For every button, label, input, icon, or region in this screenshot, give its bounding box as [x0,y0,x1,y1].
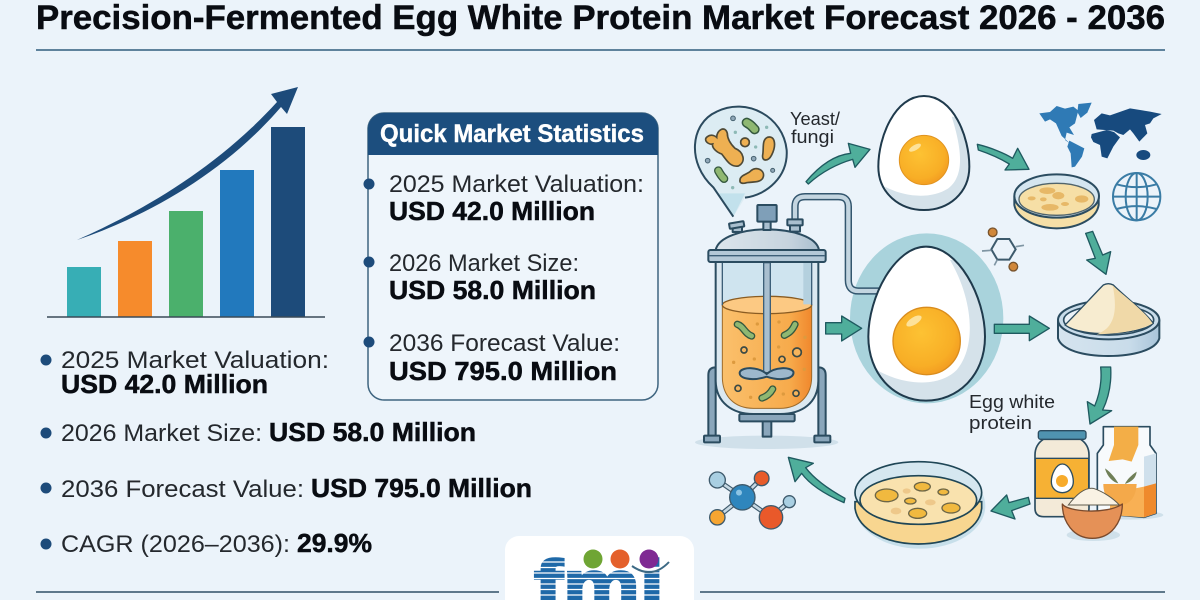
top nozzles [729,205,803,232]
label: egg white protein [969,392,1055,433]
label 2: 2026 Market Size: [389,250,579,277]
value: 2025 valuation: USD 42.0 Million [61,369,268,399]
upper egg shading [885,117,973,213]
value: 2026 size: USD 58.0 Million [269,417,476,447]
logo card [505,536,694,600]
bar 1 [67,267,101,317]
value 2: USD 58.0 Million [389,275,596,305]
arrow: fermenter to egg [826,316,862,341]
label line 1: Yeast/ [790,109,840,129]
icon: microbe speech bubble and upper egg [695,96,973,217]
bullet 3 [364,336,374,348]
bullet 1 [364,178,374,190]
icon: products, large petri dish, molecule [709,367,1163,549]
left statistics list [40,347,532,558]
bubble tail fill [717,193,745,217]
vessel [716,262,818,414]
growth arrow [77,87,298,240]
floor shadow [695,436,838,449]
big yolk [893,307,960,375]
bar 4 [220,170,254,317]
bar 3 [169,211,203,317]
liquid surface [722,296,812,314]
molecule: hexagon [982,228,1024,271]
arrow: petri to powder [1086,231,1111,274]
spores [705,116,775,172]
value 3: USD 795.0 Million [389,356,617,386]
stirrer shaft [764,263,770,373]
label: yeast/fungi [790,109,840,147]
label 1: 2025 Market Valuation: [389,171,644,198]
big egg shading [877,257,990,403]
halo [850,233,1003,403]
bullet: 2026 size [40,428,52,438]
icon: map, globe, petri dish, powder [977,103,1162,356]
yeast cluster [706,129,775,183]
arrow: yeast to egg [806,143,870,184]
world map: eurasia, africa, australia [1091,108,1162,160]
bullet: 2025 valuation [40,354,52,366]
arrow: big egg to powder [994,316,1049,341]
arc [632,562,669,572]
big egg outline [868,247,985,401]
bar 5 [271,127,305,317]
carton [1097,427,1163,520]
big egg [868,247,985,401]
bar 2 [118,241,152,317]
logo: fmi [505,536,694,600]
label 3: 2036 Forecast Value: [389,330,620,357]
panel heading: Quick Market Statistics [380,120,644,148]
arrow: petri to fermenter [788,457,845,503]
value: 2036 forecast: USD 795.0 Million [311,473,532,503]
legs and feet [704,367,830,442]
text: CAGR: CAGR (2026–2036): [61,531,290,558]
upper egg [878,96,969,210]
orange circle [610,550,630,568]
liquid [722,305,812,408]
jar [1035,431,1089,517]
text: 2025 valuation: 2025 Market Valuation: [61,347,329,374]
yolk highlight [908,142,922,153]
arrow: egg to petri dish [977,144,1029,170]
label line 1: Egg white [969,392,1055,412]
flange [708,250,826,262]
value 1: USD 42.0 Million [389,196,595,226]
dome [716,229,819,250]
panel header [368,113,658,155]
icon: big egg halo, fermenter and pipe [695,197,1003,449]
flange line [709,254,825,258]
upper egg outline [878,96,969,210]
vessel highlight [803,263,812,304]
arrow: products to petri dish [991,495,1030,519]
arrow: powder to products [1087,367,1112,424]
world map: americas [1039,103,1092,167]
bullet: CAGR [40,538,52,550]
value: CAGR: 29.9% [297,528,372,558]
wordmark stripes [530,562,670,595]
microbes in liquid [732,320,807,399]
yolk highlight [905,313,923,329]
glass upper [722,263,812,306]
chart baseline [47,316,325,318]
purple circle [640,550,658,568]
small dots [731,126,768,189]
pipe [795,197,880,291]
panel: quick market statistics [364,113,658,400]
bubble [695,107,787,217]
globe [1113,173,1160,220]
glass inner walls [722,263,812,305]
large petri dish [855,462,985,549]
label line 2: fungi [791,127,834,147]
small petri dish [1014,174,1099,228]
powder bowl [1058,284,1159,356]
bullet: 2036 forecast [40,482,52,494]
small bowl of powder [1062,488,1122,541]
panel frame [368,113,658,400]
title: Precision-Fermented Egg White Protein Market Forecast 2026 - 2036 [36,0,1165,37]
bar chart with growth arrow [47,87,325,317]
bubble outline [695,107,787,217]
green microbes [747,123,755,129]
text: 2026 size: 2026 Market Size: [61,420,262,447]
text: 2036 forecast: 2036 Forecast Value: [61,476,304,503]
label line 2: protein [969,413,1032,433]
molecule [709,471,795,529]
impeller [740,368,793,379]
upper yolk [899,135,949,185]
bullet 2 [364,256,374,268]
green circle [584,550,602,568]
